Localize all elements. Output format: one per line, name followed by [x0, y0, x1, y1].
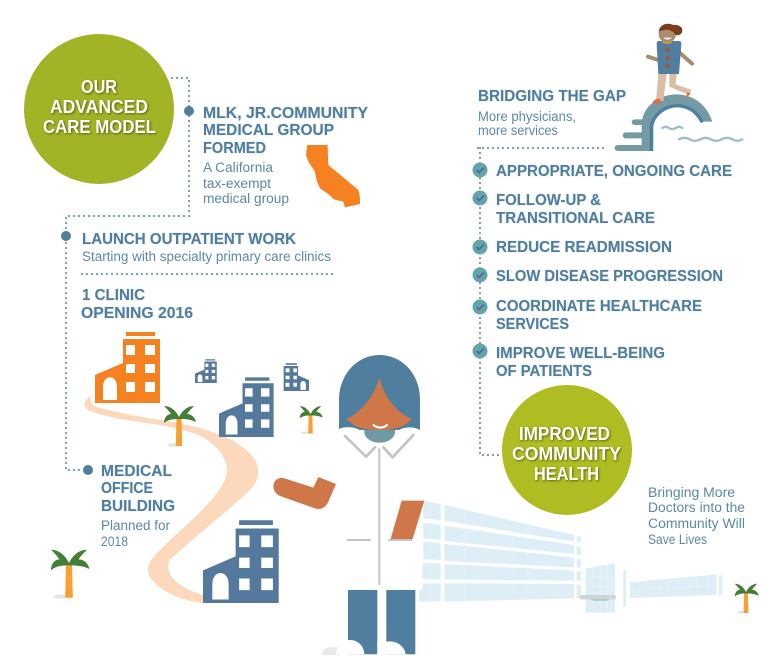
bridging the gap text: BRIDGING THE GAP [478, 88, 626, 105]
doctor figure [273, 355, 424, 655]
doctor legs [348, 590, 415, 654]
step: launch outpatient work: LAUNCH OUTPATIENT WORK [82, 231, 296, 248]
bridge [615, 94, 712, 151]
doctor coat [339, 430, 422, 590]
badge: improved community health: IMPROVED [519, 424, 610, 444]
step: medical group formed: MEDICAL GROUP [203, 122, 334, 139]
item: coordinate healthcare services: SERVICES [496, 316, 569, 333]
text: 1 clinic opening 2016: OPENING 2016 [81, 305, 193, 322]
badge: our advanced care model: OUR [81, 77, 117, 97]
text: bringing more doctors [648, 485, 745, 547]
icon: medium building [219, 377, 274, 437]
step: launch outpatient work [61, 231, 331, 264]
girl shoes [653, 92, 691, 103]
girl head [659, 25, 676, 43]
text: bringing more doctors: Bringing More [648, 485, 735, 500]
winding road [84, 394, 258, 603]
item: coordinate healthcare services [472, 298, 702, 333]
badge: improved community health [502, 385, 632, 515]
text: bringing more doctors: Save Lives [648, 532, 707, 547]
step: medical group formed: medical group [203, 191, 289, 206]
doctor lowered arm [391, 501, 424, 539]
water waves [662, 127, 742, 141]
item: improve well-being of patients [472, 344, 665, 380]
icon: palm tree far right [735, 584, 759, 614]
step: medical office building [83, 463, 175, 549]
item: coordinate healthcare services: COORDINATE HEALTHCARE [496, 298, 702, 315]
text: bringing more doctors: Community Will [648, 516, 745, 531]
item: appropriate, ongoing care: APPROPRIATE, ONGOING CARE [496, 163, 732, 180]
step: launch outpatient work: Starting with specialty primary care clinics [82, 249, 331, 264]
step: medical group formed: tax-exempt [203, 176, 271, 191]
doctor head and collar [339, 355, 420, 457]
item: follow-up and transitional care: FOLLOW-UP & [496, 192, 601, 209]
step: medical group formed: FORMED [203, 140, 266, 157]
text: bringing more doctors: Doctors into the [648, 500, 745, 515]
icon: small building left [195, 359, 217, 383]
text: 1 clinic opening 2016: 1 CLINIC [82, 287, 145, 304]
hospital building [419, 501, 722, 613]
icon: palm tree right of buildings [300, 406, 323, 434]
step: medical group formed: A California [203, 160, 273, 175]
icon: palm tree centre [164, 406, 196, 447]
badge: our advanced care model: ADVANCED [50, 97, 148, 117]
step: medical group formed [184, 105, 368, 206]
item: follow-up and transitional care [472, 190, 655, 227]
step: medical office building: MEDICAL [101, 463, 172, 480]
item: reduce readmission: REDUCE READMISSION [496, 239, 672, 256]
badge: our advanced care model: CARE MODEL [43, 117, 156, 137]
badge: our advanced care model [24, 34, 174, 184]
step: medical office building: 2018 [101, 534, 128, 549]
item: follow-up and transitional care: TRANSITIONAL CARE [496, 210, 655, 227]
girl arms [648, 50, 692, 64]
girl legs [656, 74, 692, 101]
item: improve well-being of patients: OF PATIENTS [496, 363, 592, 380]
step: medical office building: Planned for [101, 518, 170, 533]
step: medical office building: OFFICE [101, 480, 153, 497]
item: slow disease progression: SLOW DISEASE PROGRESSION [496, 268, 723, 285]
icon: small building right [284, 363, 309, 391]
step: medical group formed: MLK, JR.COMMUNITY [203, 105, 368, 122]
girl dress [657, 41, 681, 74]
doctor raised arm [273, 477, 336, 509]
icon: palm tree lower left [51, 550, 89, 599]
doctor coat seam and pockets [347, 448, 412, 585]
badge: improved community health: COMMUNITY [512, 444, 621, 464]
illustration: girl crossing bridge [615, 24, 742, 151]
bridging the gap text: More physicians, [478, 109, 576, 124]
item: improve well-being of patients: IMPROVE WELL-BEING [496, 345, 665, 362]
icon: California map [306, 145, 360, 207]
icon: medical office building [203, 520, 279, 603]
badge: improved community health: HEALTH [534, 464, 599, 484]
bridging the gap text: more services [478, 123, 558, 138]
step: medical office building: BUILDING [101, 498, 175, 515]
text: 1 clinic opening 2016 [81, 287, 193, 322]
bridging the gap text [478, 88, 626, 138]
doctor shoes [322, 647, 340, 655]
list: care outcomes [472, 162, 732, 380]
icon: orange clinic building [95, 332, 160, 403]
